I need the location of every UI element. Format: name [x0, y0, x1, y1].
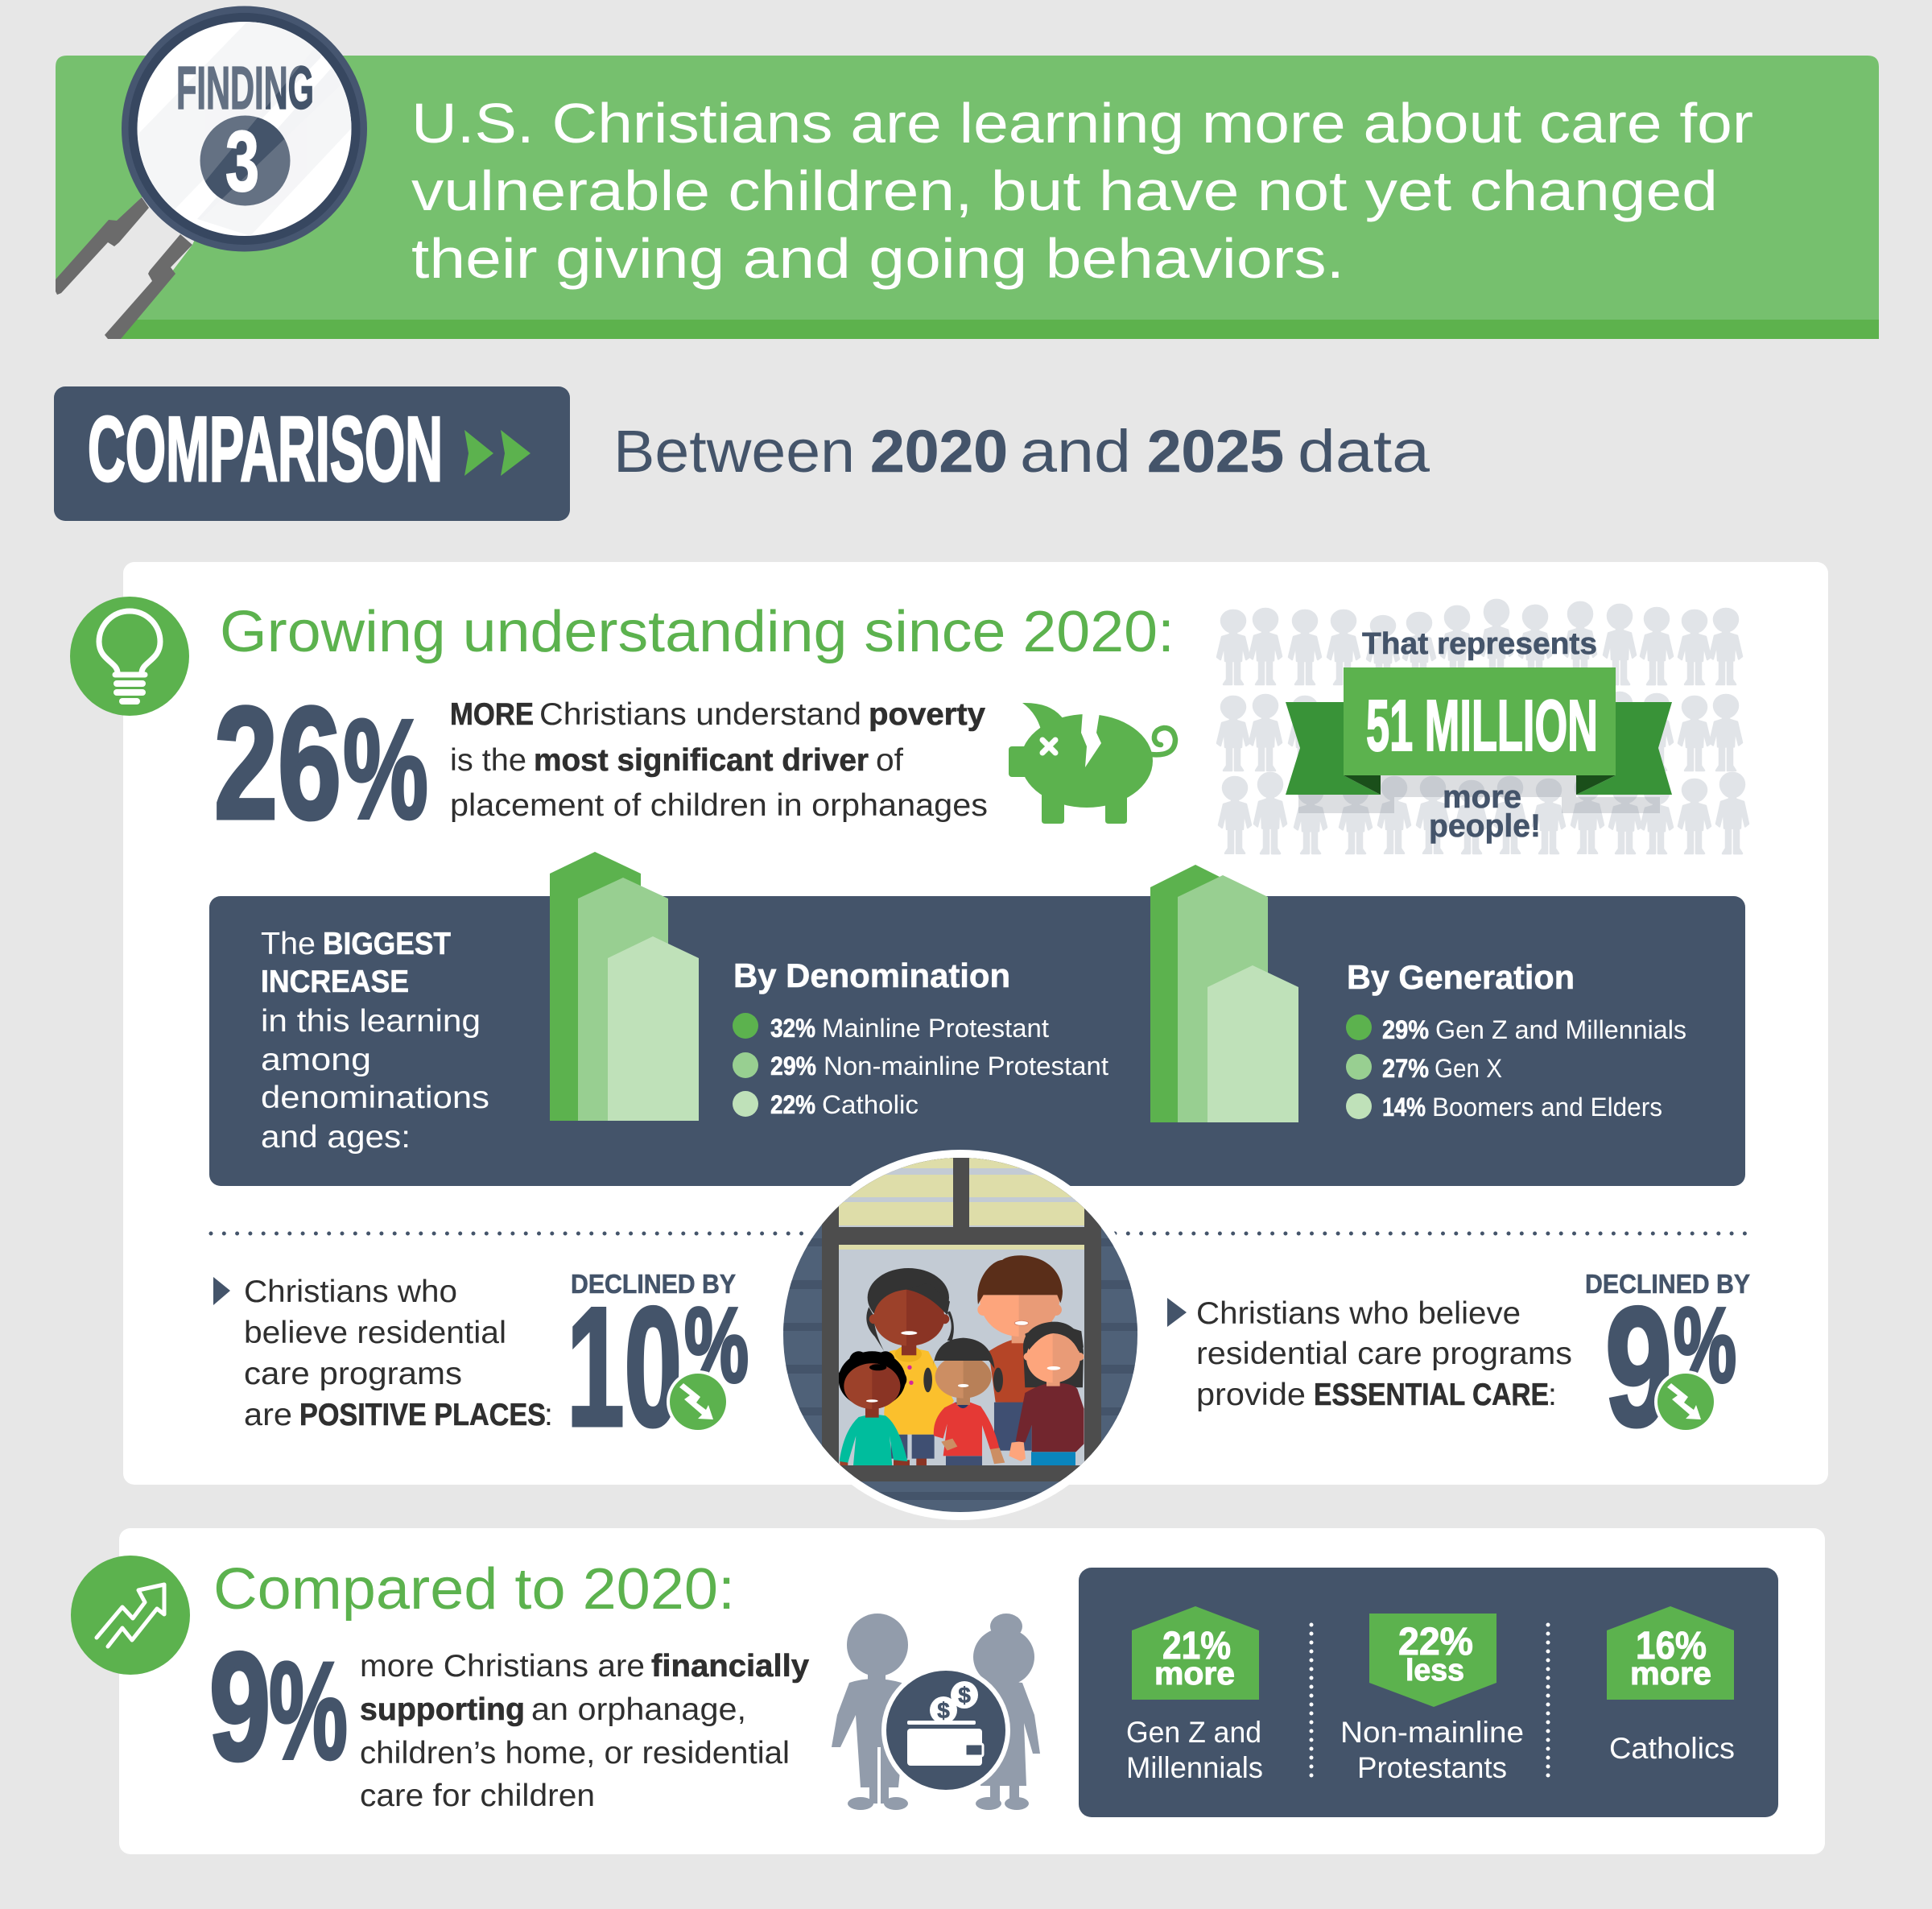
- legend: by denomination: 32%: [770, 1014, 815, 1043]
- chart: denomination bars: [550, 852, 699, 1121]
- legend: by generation: By Generation: [1347, 958, 1575, 996]
- illustration: children at window: [775, 1150, 1146, 1520]
- finding label: FINDING: [176, 54, 314, 122]
- text: biggest increase intro: denominations: [261, 1081, 489, 1115]
- heading: compared to 2020: Compared to 2020:: [213, 1557, 735, 1622]
- text: positive places statement: believe residential: [244, 1316, 506, 1350]
- text: poverty statement: of: [876, 743, 903, 778]
- crowd of people silhouettes: [1217, 600, 1748, 853]
- legend: by denomination: By Denomination: [733, 957, 1010, 994]
- comparison subtitle: 2025: [1147, 418, 1284, 485]
- text: financial support statement: financially: [651, 1649, 809, 1684]
- text: poverty statement: most significant driver: [534, 743, 869, 778]
- text: positive places statement: POSITIVE PLACES: [299, 1398, 546, 1432]
- stat: declined by 10 percent: DECLINED BY: [571, 1270, 736, 1300]
- text: financial support statement: care for children: [360, 1779, 595, 1813]
- big stat 26 percent: 26: [214, 674, 341, 852]
- number 3: 3: [225, 113, 259, 209]
- comparison subtitle: and: [1020, 418, 1131, 485]
- lens glare: [169, 34, 320, 233]
- label: gen z and millennials: Millennials: [1126, 1751, 1263, 1784]
- banner headline: U.S. Christians are learning more about care for: [411, 92, 1753, 155]
- legend: by generation: Gen Z and Millennials: [1435, 1015, 1686, 1044]
- text: biggest increase intro: INCREASE: [261, 965, 409, 999]
- text: poverty statement: placement of children in orphanages: [450, 788, 988, 823]
- stat: declined by 9 percent: 9: [1605, 1272, 1672, 1461]
- icon: wallet and coins: [907, 1681, 983, 1766]
- label: non-mainline protestants: [1340, 1716, 1524, 1784]
- comparison subtitle: data: [1298, 418, 1430, 485]
- text: biggest increase intro: BIGGEST: [323, 927, 451, 961]
- text: more people: [1429, 779, 1541, 844]
- text: poverty statement: Christians understand: [539, 697, 861, 732]
- ribbon: 51 million: [1286, 667, 1672, 813]
- magnifying glass handle, lower: [105, 234, 192, 339]
- text: biggest increase intro: [261, 927, 489, 1155]
- comparison tag: COMPARISON: [88, 399, 443, 501]
- legend: by generation: Gen X: [1435, 1054, 1502, 1083]
- label: non-mainline protestants: Non-mainline: [1340, 1716, 1524, 1749]
- text: poverty statement: is the: [450, 743, 526, 778]
- text: financial support statement: more Christians are: [360, 1649, 645, 1684]
- arrow bullet: [1167, 1298, 1187, 1327]
- magnifying glass handle, upper: [56, 197, 149, 295]
- text: positive places statement: are: [244, 1398, 292, 1432]
- stat: declined by 10 percent: 10: [567, 1272, 682, 1461]
- comparison subtitle: [613, 418, 1430, 485]
- stat: declined by 9 percent: [1585, 1270, 1750, 1461]
- badge: 16 percent more: 16%: [1636, 1625, 1707, 1667]
- figure: girl in maroon: [1009, 1322, 1084, 1466]
- legend: by denomination: Catholic: [822, 1090, 919, 1119]
- badge: 22 percent less: less: [1406, 1654, 1464, 1688]
- banner headline: [411, 92, 1753, 290]
- panel: compared to 2020: [71, 1528, 1825, 1854]
- magnifying glass badge: [122, 0, 370, 258]
- icon: rising arrows: [71, 1556, 190, 1675]
- icon: wallet and coins: $: [958, 1683, 971, 1708]
- legend: by denomination: Non-mainline Protestant: [824, 1052, 1108, 1081]
- children figures: [838, 1255, 1084, 1466]
- text: poverty statement: [450, 697, 988, 823]
- text: essential care statement: Christians who believe: [1196, 1296, 1521, 1331]
- text: positive places statement: [213, 1275, 553, 1432]
- text: financial support statement: supporting: [360, 1692, 525, 1727]
- heading: growing understanding: Growing understanding since 2020:: [220, 600, 1174, 664]
- chart: generation bars: [1150, 865, 1298, 1122]
- panel: growing understanding: [70, 562, 1828, 1520]
- icon: wallet and coins: $: [937, 1698, 950, 1723]
- figure: left adult: [832, 1614, 908, 1810]
- big stat 9 percent: [209, 1622, 348, 1792]
- panel: group changes: [1079, 1568, 1778, 1817]
- text: poverty statement: poverty: [869, 697, 985, 732]
- comparison subtitle: Between: [613, 418, 855, 485]
- text: positive places statement: :: [544, 1398, 553, 1432]
- panel: biggest increase: [209, 852, 1745, 1186]
- figure: tall boy: [977, 1255, 1063, 1451]
- text: financial support statement: children’s home, or residential: [360, 1736, 790, 1771]
- text: poverty statement: MORE: [450, 697, 534, 732]
- legend: by denomination: Mainline Protestant: [822, 1014, 1049, 1043]
- text: financial support statement: an orphanage,: [531, 1692, 746, 1727]
- big stat 9 percent: %: [269, 1634, 348, 1788]
- text: essential care statement: provide: [1196, 1378, 1306, 1412]
- text: biggest increase intro: The: [261, 927, 316, 961]
- double chevron arrows: [464, 430, 530, 476]
- big stat 26 percent: %: [343, 691, 428, 849]
- legend: by denomination: 22%: [770, 1090, 815, 1119]
- badge: 21 percent more: 21%: [1162, 1625, 1231, 1667]
- icon: down arrow badge: [667, 1370, 729, 1433]
- label: gen z and millennials: [1126, 1716, 1263, 1784]
- number 3: [200, 113, 290, 209]
- comparison subtitle: 2020: [870, 418, 1008, 485]
- banner headline: vulnerable children, but have not yet changed: [411, 159, 1718, 222]
- text: essential care statement: ESSENTIAL CARE: [1314, 1378, 1549, 1412]
- text: positive places statement: care programs: [244, 1357, 462, 1391]
- legend: by generation: 27%: [1382, 1054, 1429, 1083]
- stat: declined by 9 percent: %: [1674, 1286, 1736, 1404]
- legend: by denomination: 29%: [770, 1052, 816, 1081]
- badge: 16 percent more: [1607, 1606, 1734, 1700]
- legend: by generation: 29%: [1382, 1015, 1429, 1044]
- comparison tag: [54, 386, 570, 521]
- text: more people: more: [1443, 779, 1521, 815]
- badge: 22 percent less: [1369, 1614, 1496, 1707]
- text: biggest increase intro: and ages:: [261, 1120, 411, 1155]
- label: catholics: Catholics: [1609, 1732, 1735, 1765]
- text: that represents: That represents: [1362, 627, 1597, 661]
- badge: 16 percent more: more: [1630, 1656, 1711, 1692]
- label: non-mainline protestants: Protestants: [1357, 1751, 1507, 1784]
- illustration: couple with wallet: [832, 1614, 1040, 1810]
- legend: by generation: [1346, 958, 1686, 1122]
- text: biggest increase intro: in this learning: [261, 1004, 481, 1039]
- banner lower stripe: [121, 320, 1879, 339]
- big stat 9 percent: 9: [209, 1622, 270, 1792]
- arrow bullet: [213, 1277, 230, 1305]
- stat: declined by 9 percent: DECLINED BY: [1585, 1270, 1750, 1300]
- badge: 21 percent more: [1132, 1606, 1259, 1700]
- badge: 22 percent less: 22%: [1398, 1621, 1473, 1663]
- text: essential care statement: :: [1548, 1378, 1557, 1412]
- header banner: [56, 0, 1879, 339]
- figure: girl in yellow: [866, 1268, 954, 1466]
- icon: down arrow badge: [1654, 1370, 1717, 1433]
- legend: by generation: 14%: [1382, 1093, 1426, 1122]
- 51 million label: 51 MILLION: [1366, 686, 1598, 766]
- badge: 21 percent more: more: [1154, 1656, 1235, 1692]
- stat: declined by 10 percent: %: [684, 1286, 749, 1404]
- figure: child in red: [923, 1338, 1005, 1466]
- banner green panel: [56, 56, 1879, 339]
- text: more people: people!: [1429, 808, 1541, 844]
- text: positive places statement: Christians who: [244, 1275, 457, 1309]
- figure: child in teal: [838, 1351, 910, 1466]
- text: financial support statement: [360, 1649, 809, 1813]
- text: biggest increase intro: among: [261, 1043, 371, 1077]
- text: essential care statement: residential care programs: [1196, 1337, 1572, 1371]
- label: gen z and millennials: Gen Z and: [1126, 1716, 1261, 1749]
- banner headline: their giving and going behaviors.: [411, 227, 1344, 290]
- legend: by generation: Boomers and Elders: [1432, 1093, 1662, 1122]
- icon: broken piggy bank: [1009, 703, 1175, 824]
- figure: right adult: [973, 1614, 1040, 1810]
- legend: by denomination: [733, 957, 1108, 1119]
- text: essential care statement: [1167, 1296, 1572, 1412]
- icon: light bulb: [70, 597, 189, 716]
